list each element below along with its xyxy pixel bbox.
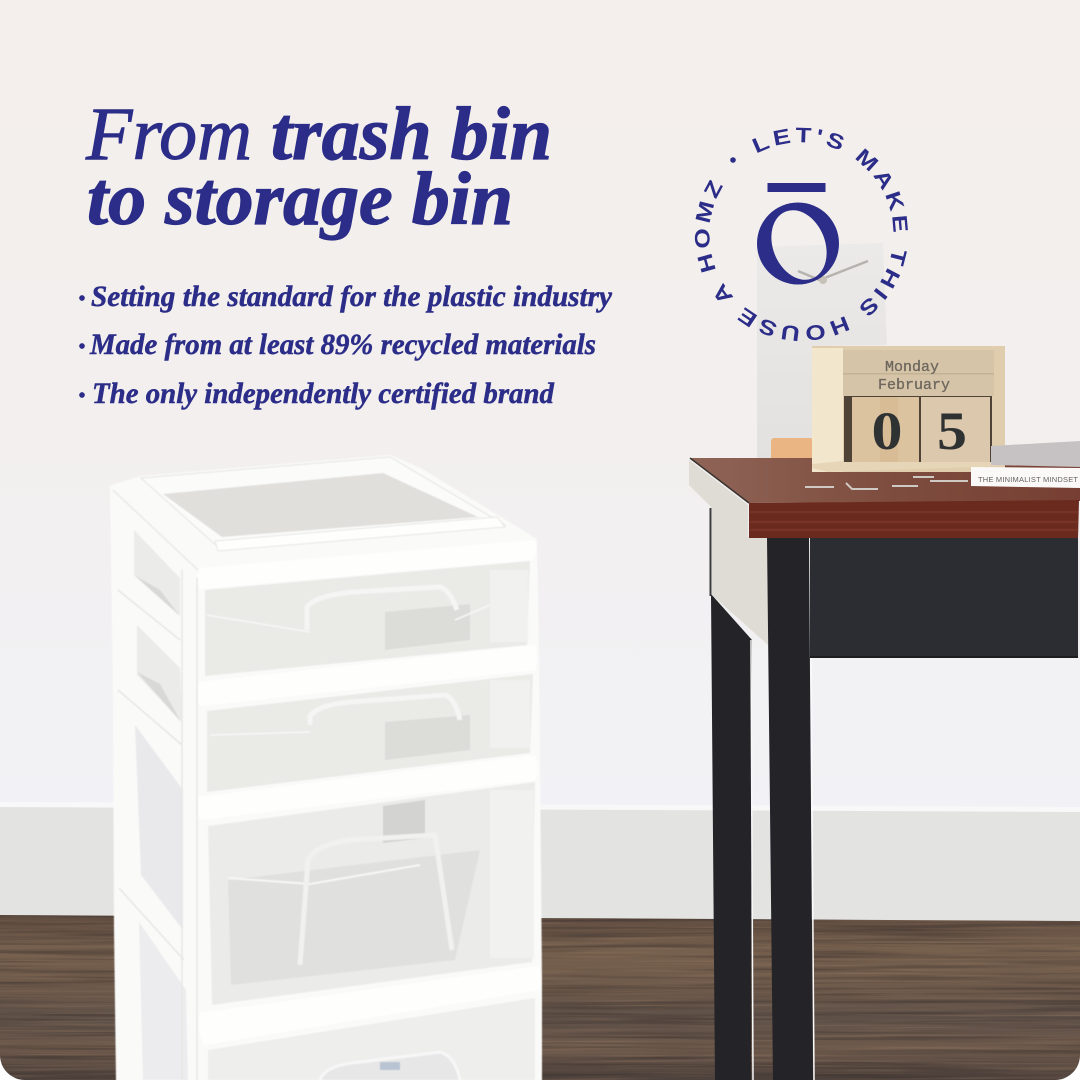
frame seams — [118, 570, 197, 1080]
table top surface — [690, 458, 1080, 503]
lid — [141, 457, 505, 551]
books: THE MINIMALIST MINDSET — [978, 475, 1078, 484]
wood floor — [0, 915, 1080, 1080]
desk calendar: 5 — [937, 401, 967, 461]
left side frame windows — [134, 530, 188, 1080]
badge dot — [730, 157, 736, 163]
silver side panel — [689, 460, 768, 645]
back leg — [711, 594, 752, 1080]
orange tape roll — [771, 438, 812, 458]
rim 3 — [196, 755, 538, 820]
baseboard — [0, 806, 1080, 921]
cabinet body — [112, 457, 540, 1080]
bullet: standard: Setting the standard for the plastic industry — [91, 280, 613, 313]
clock — [757, 243, 887, 461]
table with calendar, clock and books — [689, 243, 1080, 1080]
title: From trash bin — [85, 93, 552, 176]
desk calendar — [812, 346, 1005, 472]
table edge — [749, 500, 1079, 538]
title — [85, 93, 552, 241]
front leg — [767, 538, 813, 1080]
circular tagline: LET'S MAKE THIS HOUSE A HOMZ — [694, 128, 908, 342]
logo o — [757, 202, 839, 284]
desk calendar: February — [878, 377, 950, 394]
plastic storage drawers — [112, 457, 541, 1080]
desk calendar: 0 — [872, 401, 902, 461]
bullet: recycled: Made from at least 89% recycled materials — [89, 328, 596, 361]
title: to storage bin — [87, 158, 513, 241]
drawer 3 — [208, 782, 535, 1005]
bullet: certified: The only independently certified brand — [92, 377, 555, 410]
paper clips — [805, 477, 968, 489]
drawer 4 — [208, 998, 535, 1080]
drawer 1 — [205, 561, 530, 676]
calendar text: Monday — [885, 359, 939, 376]
brand badge — [694, 128, 908, 342]
bullet list — [79, 280, 613, 410]
logo bar — [768, 183, 826, 192]
rim 4 — [199, 966, 541, 1045]
drawer 2 — [207, 674, 533, 792]
books — [971, 441, 1080, 488]
rim 2 — [196, 645, 537, 706]
apron — [810, 538, 1078, 657]
top rim — [198, 540, 536, 589]
